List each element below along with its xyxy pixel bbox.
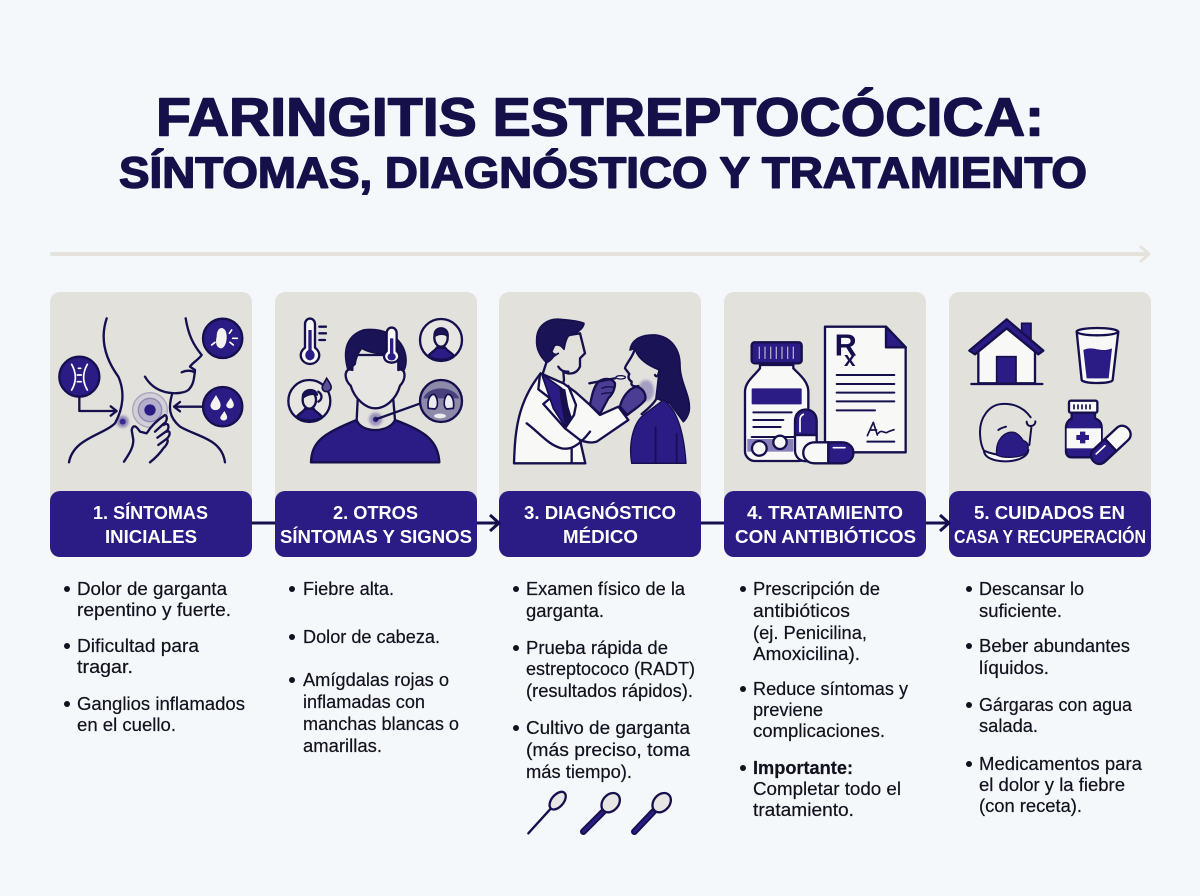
- text block: step 4: Importante:: [753, 758, 853, 778]
- text block: step 5: líquidos.: [979, 658, 1049, 678]
- text block: step 5: Gárgaras con agua: [979, 695, 1133, 715]
- text block: step 2: manchas blancas o: [303, 714, 459, 734]
- icon: prescription sheet: x: [844, 348, 856, 371]
- heading: step 3: [499, 491, 701, 557]
- title: SÍNTOMAS, DIAGNÓSTICO Y TRATAMIENTO: [119, 148, 1087, 198]
- text block: step 2: Fiebre alta.: [303, 579, 394, 599]
- icon: bacteria circle: [203, 319, 242, 358]
- icon: prescription sheet: [825, 327, 906, 452]
- text block: step 5: Medicamentos para: [979, 754, 1143, 774]
- arrow: step 2 to 3: [477, 515, 499, 531]
- text block: step 1: Dolor de garganta: [77, 579, 228, 599]
- text block: step 2: amarillas.: [303, 736, 382, 756]
- title: FARINGITIS ESTREPTOCÓCICA:: [156, 88, 1044, 148]
- text block: step 4: tratamiento.: [753, 800, 854, 820]
- arrow: step 3 to 4: [701, 522, 724, 524]
- text block: step 3: garganta.: [526, 601, 604, 621]
- icon: sweating circle: [288, 378, 331, 422]
- heading: step 5: [949, 491, 1151, 557]
- text block: step 5: suficiente.: [979, 601, 1062, 621]
- arrow: step 1 to 2: [252, 522, 275, 524]
- heading: step 3: 3. DIAGNÓSTICO: [524, 502, 676, 523]
- icon: tonsils circle: [420, 380, 462, 422]
- text block: step 4: (ej. Penicilina,: [753, 623, 867, 643]
- text block: step 3: (resultados rápidos).: [526, 681, 693, 701]
- text block: step 3: [513, 579, 695, 782]
- text block: step 5: salada.: [979, 716, 1038, 736]
- text block: step 4: complicaciones.: [753, 721, 885, 741]
- heading: step 1: INICIALES: [105, 527, 197, 547]
- text block: step 3: más tiempo).: [526, 762, 632, 782]
- text block: step 4: Amoxicilina).: [753, 644, 860, 664]
- title: [119, 88, 1087, 198]
- icon: swab thin: [528, 789, 569, 833]
- arrow: timeline: [52, 247, 1149, 261]
- text block: step 4: Reduce síntomas y: [753, 679, 908, 699]
- text block: step 5: el dolor y la fiebre: [979, 775, 1125, 795]
- icon: house: [969, 319, 1043, 384]
- text block: step 1: repentino y fuerte.: [77, 600, 231, 620]
- icon: headache circle: [420, 319, 462, 361]
- panel: step 4: [724, 292, 926, 557]
- icon: capsules: [795, 409, 853, 463]
- text block: step 2: [289, 579, 459, 756]
- text block: step 5: Beber abundantes: [979, 636, 1130, 656]
- icon: gargle sphere: [980, 404, 1035, 461]
- doctor: [514, 319, 645, 463]
- text block: step 2: inflamadas con: [303, 692, 425, 712]
- heading: step 1: 1. SÍNTOMAS: [93, 502, 208, 523]
- text block: step 1: Dificultad para: [77, 636, 200, 656]
- heading: step 4: [724, 491, 926, 557]
- icon: glass of water: [1077, 328, 1118, 383]
- icon: patient with fever: [288, 319, 462, 462]
- text block: step 1: [64, 579, 245, 735]
- icon: medicine bottle and capsule: [1066, 401, 1134, 467]
- icon: thermometer: [301, 319, 326, 364]
- icon: home care set: [969, 319, 1118, 384]
- icon: prescription sheet: R: [835, 329, 857, 363]
- icon: throat profile: [59, 318, 242, 462]
- text block: step 5: (con receta).: [979, 796, 1082, 816]
- icon: doctor examining patient: [514, 319, 689, 463]
- heading: step 3: MÉDICO: [563, 526, 638, 547]
- text block: step 3: Prueba rápida de: [526, 638, 668, 658]
- text block: step 3: (más preciso, toma: [526, 740, 691, 760]
- panel: step 3: [499, 292, 701, 557]
- icon: swab thick: [583, 789, 624, 832]
- panel: step 2: [275, 292, 477, 557]
- woman: [625, 335, 689, 463]
- heading: step 1: [50, 491, 252, 557]
- text block: step 2: Amígdalas rojas o: [303, 670, 449, 690]
- text block: step 3: estreptococo (RADT): [526, 659, 695, 679]
- icon: droplets circle: [203, 387, 242, 426]
- text block: step 3: Cultivo de garganta: [526, 718, 691, 738]
- heading: step 2: 2. OTROS: [333, 503, 418, 523]
- text block: step 4: Completar todo el: [753, 779, 901, 799]
- panel: step 1: [50, 292, 252, 557]
- heading: step 5: CASA Y RECUPERACIÓN: [954, 526, 1146, 547]
- text block: step 1: en el cuello.: [77, 715, 176, 735]
- text block: step 1: Ganglios inflamados: [77, 694, 245, 714]
- text block: step 2: Dolor de cabeza.: [303, 627, 440, 647]
- panel: step 5: [949, 292, 1151, 557]
- arrow: step 4 to 5: [926, 515, 949, 531]
- text block: step 4: previene: [753, 700, 823, 720]
- heading: step 4: CON ANTIBIÓTICOS: [735, 526, 916, 547]
- heading: step 5: 5. CUIDADOS EN: [974, 503, 1125, 523]
- text block: step 5: [966, 579, 1143, 816]
- heading: step 2: SÍNTOMAS Y SIGNOS: [280, 526, 472, 547]
- heading: step 4: 4. TRATAMIENTO: [747, 503, 903, 523]
- icon: swab thick second: [634, 789, 675, 832]
- text block: step 4: antibióticos: [753, 601, 850, 621]
- text block: step 5: Descansar lo: [979, 579, 1084, 599]
- text block: step 3: Examen físico de la: [526, 579, 686, 599]
- text block: step 4: Prescripción de: [753, 579, 880, 599]
- icon: medicine and prescription: [745, 327, 906, 463]
- text block: step 1: tragar.: [77, 657, 133, 677]
- heading: step 2: [275, 491, 477, 557]
- icon: left circle: [59, 357, 99, 397]
- icon: pill bottle: [745, 342, 808, 461]
- text block: step 4: [740, 579, 908, 820]
